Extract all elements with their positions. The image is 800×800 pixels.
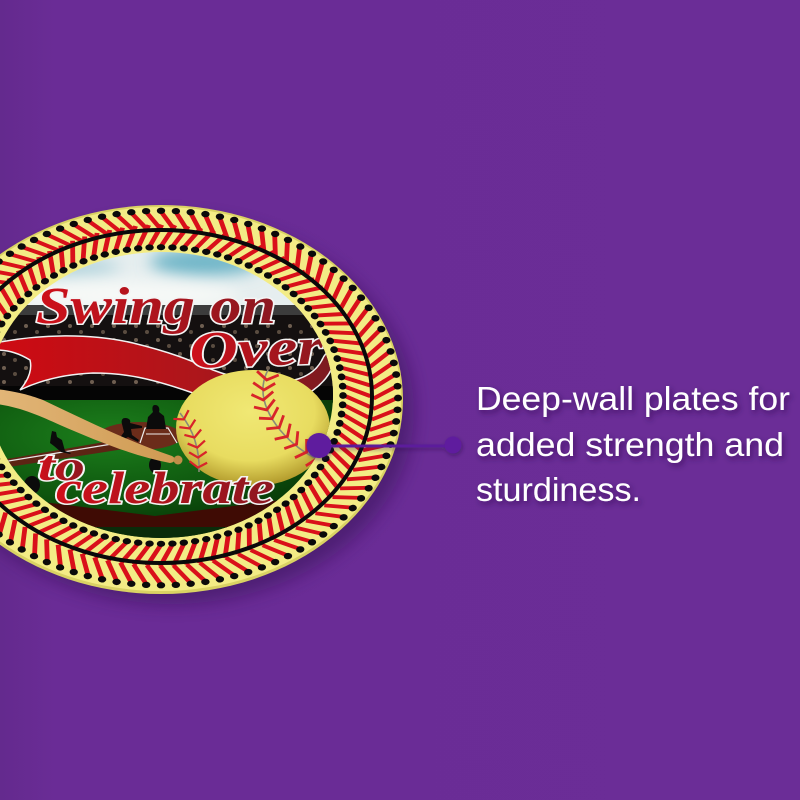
plate shadow <box>0 218 414 604</box>
text: celebrate: celebrate <box>56 462 274 513</box>
bat <box>0 389 182 464</box>
infield dirt <box>7 422 178 466</box>
inner stitching ring <box>0 198 398 593</box>
callout text: sturdiness. <box>476 472 641 509</box>
callout text: added strength and <box>476 427 784 464</box>
callout text: Deep-wall plates for <box>476 381 790 418</box>
sky <box>22 252 300 311</box>
stadium picture <box>0 248 350 541</box>
centre seam <box>0 230 372 563</box>
callout line and markers <box>306 433 462 458</box>
banner <box>0 335 331 394</box>
stands <box>0 305 350 403</box>
player silhouettes <box>24 405 166 494</box>
softball <box>173 370 330 486</box>
callout text <box>476 381 790 509</box>
text: Over: Over <box>188 318 325 380</box>
warning track <box>48 500 278 528</box>
plate <box>0 205 420 610</box>
text: Swing on: Swing on <box>36 278 276 335</box>
ball seam left <box>173 410 207 472</box>
grass field <box>0 400 350 540</box>
text: to: to <box>38 444 85 490</box>
outer stitching ring <box>0 179 434 617</box>
plate rim <box>0 205 403 594</box>
ball seam right <box>251 370 321 469</box>
